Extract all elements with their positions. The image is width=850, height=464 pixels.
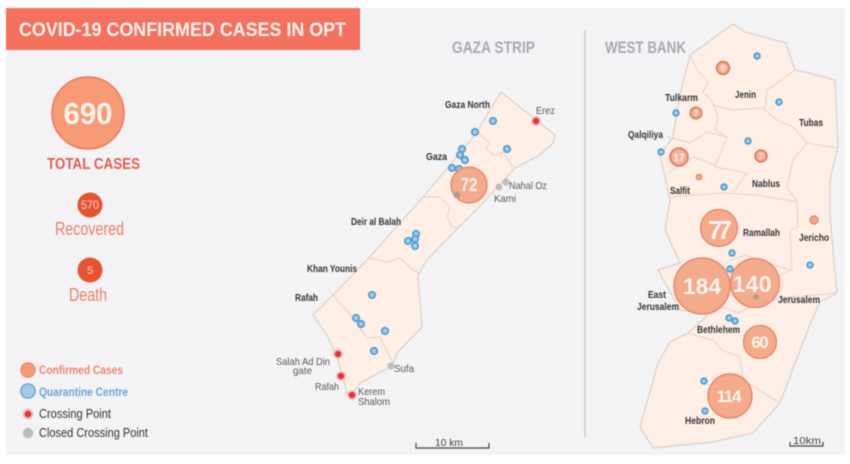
- title banner: [6, 8, 360, 50]
- death count: 5: [87, 265, 93, 277]
- Gaza crossing labels: [276, 105, 555, 408]
- Gaza crossing labels: Erez: [536, 105, 555, 117]
- Gaza quarantine centres: [353, 118, 510, 354]
- death count: [78, 258, 102, 282]
- legend: closed crossing point: Closed Crossing Point: [39, 425, 148, 440]
- total cases circle: 690: [64, 96, 112, 131]
- West Bank confirmed case circles: 7: [759, 152, 764, 161]
- Gaza governorate labels: [295, 99, 490, 304]
- West Bank confirmed case circles: 6: [721, 64, 726, 73]
- recovered count: 570: [81, 198, 99, 212]
- heading: Gaza Strip: GAZA STRIP: [452, 39, 535, 57]
- Gaza scale bar: [416, 437, 489, 449]
- Gaza governorate labels: Gaza North: [445, 99, 490, 111]
- Gaza crossing labels: Kami: [494, 193, 516, 205]
- West Bank outline: [640, 24, 838, 448]
- West Bank governorate labels: Ramallah: [743, 227, 780, 239]
- West Bank governorate labels: Hebron: [685, 415, 715, 427]
- Gaza crossing labels: gate: [293, 365, 312, 377]
- legend: quarantine centre: Quarantine Centre: [39, 385, 128, 399]
- West Bank confirmed case circles: 17: [673, 153, 685, 164]
- closed crossing points: [388, 178, 510, 370]
- West Bank governorate labels: Tulkarm: [665, 92, 698, 104]
- West Bank governorate labels: Jenin: [735, 89, 756, 101]
- crossing points: [333, 116, 541, 400]
- Gaza crossing labels: Shalom: [358, 396, 390, 408]
- West Bank governorate labels: Nablus: [752, 178, 780, 190]
- West Bank confirmed case circles: 7: [694, 109, 699, 118]
- West Bank governorate labels: Jerusalem: [778, 294, 820, 306]
- panel: total statistics: [47, 77, 140, 305]
- Gaza crossing labels: Salah Ad Din: [276, 356, 330, 368]
- Gaza crossing labels: Rafah: [315, 381, 339, 393]
- West Bank confirmed case circles: 114: [716, 387, 742, 406]
- recovered count: [78, 192, 102, 218]
- total cases label: TOTAL CASES: [47, 156, 140, 173]
- West Bank confirmed case circles: 140: [732, 271, 772, 297]
- West Bank governorate labels: Jericho: [799, 232, 829, 244]
- West Bank governorate labels: [628, 89, 829, 427]
- West Bank scale bar: 10km: [793, 435, 821, 447]
- West Bank governorate labels: Salfit: [670, 185, 690, 197]
- legend: crossing point: Crossing Point: [39, 406, 111, 421]
- West Bank closed crossing point: [753, 294, 759, 300]
- legend: confirmed cases: Confirmed Cases: [39, 363, 123, 377]
- Gaza crossing labels: Kerem: [358, 386, 385, 398]
- West Bank governorate labels: East: [648, 289, 666, 301]
- title banner: COVID-19 CONFIRMED CASES IN OPT: [19, 20, 346, 41]
- Gaza governorate labels: Deir al Balah: [351, 216, 401, 228]
- Gaza confirmed cases 72: [451, 167, 487, 203]
- death label: Death: [69, 285, 107, 305]
- Gaza governorate labels: Rafah: [295, 292, 318, 304]
- West Bank quarantine centres: [658, 53, 813, 414]
- Gaza scale bar: 10 km: [435, 437, 463, 449]
- legend: [21, 363, 148, 440]
- Gaza governorate labels: Khan Younis: [307, 263, 357, 275]
- West Bank confirmed case circles: 60: [752, 334, 768, 352]
- West Bank governorate labels: Jerusalem: [637, 301, 679, 313]
- West Bank governorate labels: Bethlehem: [697, 324, 740, 336]
- recovered label: Recovered: [55, 219, 124, 239]
- Gaza governorate labels: Gaza: [426, 151, 447, 163]
- map: West Bank: [628, 24, 838, 448]
- Gaza crossing labels: Nahal Oz: [509, 180, 547, 192]
- West Bank governorate labels: Qalqiliya: [628, 129, 663, 141]
- total cases circle: [52, 77, 124, 149]
- Gaza crossing labels: Sufa: [394, 363, 414, 375]
- Gaza outline: [313, 92, 555, 395]
- West Bank confirmed case circles: 77: [708, 215, 732, 245]
- West Bank confirmed case circles: 184: [683, 274, 721, 299]
- heading: West Bank: WEST BANK: [605, 39, 686, 57]
- map: Gaza Strip: [276, 92, 555, 449]
- Gaza confirmed cases 72: 72: [460, 175, 478, 195]
- West Bank confirmed case circles: [670, 62, 818, 418]
- West Bank governorate labels: Tubas: [799, 117, 823, 129]
